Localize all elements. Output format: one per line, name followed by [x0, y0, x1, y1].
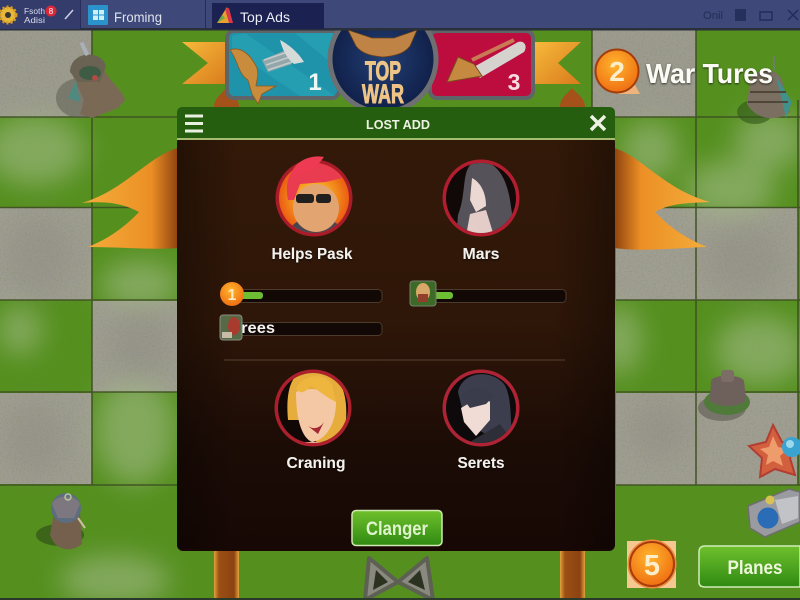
unit: top-right tower [737, 56, 792, 124]
logo text: TOP [365, 56, 401, 86]
Planes button: Planes [728, 558, 782, 579]
divider [224, 360, 565, 361]
icon: pencil [65, 10, 73, 19]
Top War medal [330, 6, 436, 112]
modal header [177, 107, 615, 140]
badge 2 with War Tures label [596, 50, 773, 94]
icon: windows tile [88, 5, 108, 25]
big right flag [614, 148, 710, 250]
character: Craning [274, 369, 352, 472]
progress row: Mars [410, 281, 566, 306]
icon: sun gear [0, 7, 16, 23]
character: Helps Pask [272, 156, 353, 263]
app label with notification: Fsoth [24, 6, 45, 16]
avatar thumbnail [220, 315, 242, 340]
name label: Serets [458, 455, 505, 472]
avatar thumbnail [410, 281, 436, 306]
badge 1 [220, 282, 244, 306]
top window bar [0, 0, 800, 30]
progress row: Trees [220, 315, 382, 340]
icon: trophy and crossbow [230, 40, 304, 104]
icon: menu [185, 116, 203, 131]
modal panel [177, 107, 615, 551]
label War Tures: War Tures [646, 58, 773, 89]
logo text: WAR [362, 79, 404, 109]
unit: cauldron turret [698, 370, 750, 421]
name label: Helps Pask [272, 246, 353, 263]
row label: Trees [232, 320, 275, 337]
Planes button [699, 546, 800, 587]
teal reward badge [227, 31, 339, 104]
badge 5 [627, 540, 676, 588]
badge 1: 1 [228, 287, 237, 304]
app label with notification: 8 [49, 7, 54, 16]
tab label Top Ads: Top Ads [240, 9, 290, 25]
unit: left tower soldier [56, 42, 125, 118]
character: Serets [442, 370, 520, 472]
icon: close [591, 116, 605, 130]
app label with notification: Adisi [24, 15, 45, 25]
reward count 1: 1 [308, 69, 322, 96]
Clanger button [352, 510, 442, 546]
app label with notification [24, 6, 56, 25]
name label: Craning [286, 455, 346, 472]
badge 5: 5 [644, 550, 660, 582]
badge 2 with War Tures label: 2 [609, 56, 625, 87]
icon: eagle [348, 30, 417, 57]
window controls [703, 9, 798, 22]
reward count 3: 3 [508, 69, 520, 95]
character: Mars [442, 160, 520, 263]
icon: arrow missile [447, 40, 526, 82]
big left flag [82, 148, 178, 249]
icon: stone tablet with blue orb [748, 489, 800, 537]
active tab [212, 3, 324, 29]
icon: colored A [217, 7, 233, 23]
unit: bottom-left soldier [36, 493, 85, 549]
top ribbons [182, 42, 585, 107]
Clanger button: Clanger [366, 519, 429, 540]
name label: Mars [462, 246, 500, 263]
logo text [362, 56, 404, 109]
tab label Froming: Froming [114, 9, 162, 25]
progress row: 1 [220, 282, 382, 306]
bottom truss with posts [214, 551, 585, 600]
red reward badge [430, 31, 533, 98]
icon: red star with blue gem [749, 425, 800, 477]
modal title: LOST ADD [366, 118, 430, 132]
window controls: Onil [703, 10, 723, 22]
